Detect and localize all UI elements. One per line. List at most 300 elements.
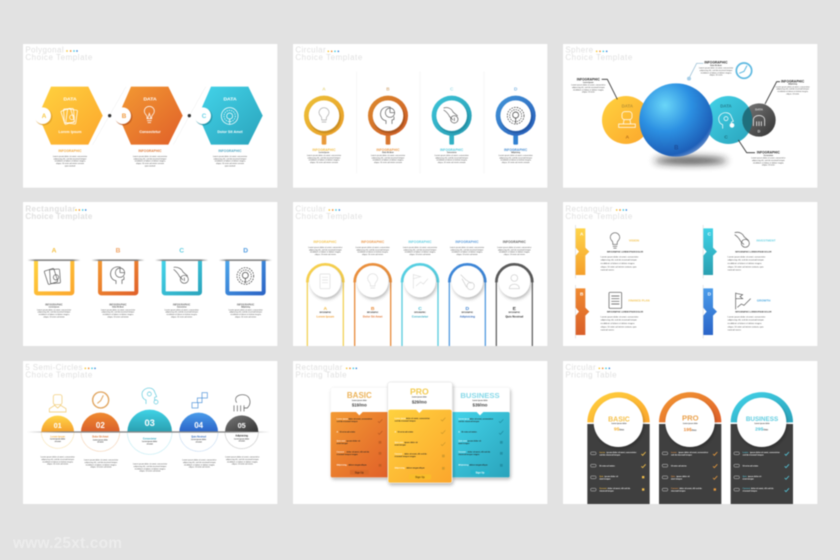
ring captions: Lorem ipsum dolor sit amet, consectetur	[499, 154, 533, 157]
pricing column: pro: Ut enim ad minim	[671, 464, 687, 467]
arch E: adipiscing elit, sed do eiusmod tempor	[498, 248, 531, 251]
tab D: nostrud exerci	[728, 329, 742, 332]
pricing card: basic: dolor sit amet, consectetur	[348, 418, 372, 421]
callout: C: Lorem ipsum dolor sit amet, consectetur	[751, 157, 786, 160]
ring B	[368, 87, 408, 145]
pricing column: basic: ipsum dolor sit amet, consectetur	[607, 451, 637, 454]
pricing card: basic: Lorem ipsum	[337, 419, 349, 421]
pricing column: business: sed do eiusmod tempor	[743, 453, 764, 456]
ring captions: aliqua. Ut enim ad minim veniam	[310, 161, 338, 164]
title: rectangular: Choice Template	[25, 212, 93, 221]
pricing column: pro: amet tempor	[671, 477, 682, 480]
frame captions: incididunt ut labore et dolore magna	[230, 313, 262, 316]
callout: D: Adipisicing	[788, 83, 797, 86]
title: rectangular tabs: Rectangular	[565, 204, 613, 213]
title: rectangular	[25, 204, 93, 221]
arch B	[355, 240, 391, 346]
captions: incididunt ut labore et dolore magna	[135, 160, 166, 163]
arch A	[307, 240, 343, 346]
arch B: incididunt ut labore et dolore magna	[357, 251, 389, 254]
ring captions: incididunt ut labore et dolore magna	[500, 159, 532, 162]
title: circular arches	[295, 204, 363, 221]
ring B: B	[386, 87, 390, 92]
pricing card: business: Sign Up	[476, 472, 485, 474]
frame captions: aliqua. Ut enim ad minim	[171, 315, 193, 318]
title: rectangular pricing	[295, 363, 357, 379]
semi-circle 02: sit amet	[97, 441, 104, 444]
tab C: INFOGRAPHIC LOREM IPSUM DOLOR	[735, 251, 772, 254]
arch E: INFOGRAPHIC	[503, 240, 527, 244]
pricing card: pro	[388, 382, 452, 483]
pricing card: basic: BASIC	[347, 391, 372, 400]
arch B: adipiscing elit, sed do eiusmod tempor	[356, 248, 389, 251]
semi-circle 05: 05	[238, 421, 246, 430]
pricing card: business: dolor sit amet, consectetur	[469, 418, 493, 421]
title: circular arches: Choice Template	[295, 212, 363, 221]
callout: C: adipiscing elit, sed do eiusmod tempor	[752, 159, 785, 162]
semi-circle 01: sit amet	[55, 440, 61, 443]
callout: B with clock: incididunt ut labore et dolore magna	[701, 71, 732, 74]
pricing column: pro	[659, 392, 721, 504]
arch A: adipiscing elit, sed do eiusmod tempor	[309, 248, 342, 251]
frame B: B	[116, 248, 121, 255]
arch C: aliqua. Ut enim ad minim	[409, 253, 431, 256]
pricing column: business: Ut enim ad minim	[743, 464, 759, 467]
ring captions: aliqua. Ut enim ad minim veniam	[502, 161, 530, 164]
arch E: incididunt ut labore et dolore magna	[499, 251, 531, 254]
arch C: INFOGRAPHIC	[408, 240, 432, 244]
pricing column: business: dolor sit amet, elit sed do	[751, 487, 774, 490]
title: polygonal: Choice Template	[25, 53, 93, 62]
arch E: INFOGRAPHIC	[509, 311, 521, 314]
semi-circle 03: Lorem ipsum dolor sit amet, consectetur	[133, 463, 167, 466]
arch D: Lorem ipsum dolor sit amet, consectetur	[450, 246, 484, 249]
circle C	[704, 96, 752, 144]
ring captions: INFOGRAPHIC	[504, 148, 528, 152]
callout: B with clock: Lorem ipsum dolor sit amet, consectetur	[699, 67, 733, 70]
frame captions: Dolor Sit Amet	[112, 306, 124, 309]
frame captions: INFOGRAPHIC	[173, 303, 191, 306]
tab C	[703, 225, 776, 278]
pricing column: basic: BASIC	[608, 416, 630, 423]
ring captions: incididunt ut labore et dolore magna	[373, 159, 404, 162]
tab A: Lorem ipsum dolor sit amet, consectetur	[601, 255, 639, 258]
frame A: A	[52, 248, 57, 255]
title: rectangular pricing: Rectangular	[295, 363, 343, 372]
frame captions: Lorem ipsum dolor sit amet, consectetur	[37, 308, 71, 311]
ring C: C	[450, 87, 454, 92]
frame captions: Adipisicing	[241, 306, 250, 309]
pricing column: pro: ipsum dolor sit	[676, 475, 690, 478]
ring A	[304, 87, 344, 145]
callout: B with clock: aliqua. Ut enim	[710, 74, 723, 77]
pricing card: basic: dolore magna aliqua	[348, 464, 367, 466]
title: sphere: Sphere	[565, 46, 594, 55]
arch B: aliqua. Ut enim ad minim	[362, 253, 384, 256]
pricing card: pro: Ut enim ad minim	[398, 430, 414, 433]
title: circular pricing: Pricing Table	[565, 370, 617, 379]
arch E: Lorem ipsum dolor sit amet, consectetur	[497, 246, 532, 249]
tab B: adipiscing elit, sed do eiusmod tempor	[601, 319, 637, 322]
title: rectangular tabs: Choice Template	[565, 212, 633, 221]
frame C	[155, 248, 208, 295]
circle D	[742, 103, 776, 137]
pricing column: business	[731, 392, 793, 504]
tab D: D	[708, 292, 712, 297]
semi-circle 04: Quis Nostrud	[191, 435, 207, 438]
pricing column: basic: eiusmod tempor	[599, 489, 614, 492]
captions: adipiscing elit, sed do eiusmod tempor	[134, 157, 167, 160]
tab A: nostrud exerci	[601, 269, 615, 272]
pricing column: basic: Lorem	[599, 452, 605, 454]
pricing column: basic: Consect	[599, 487, 607, 490]
circle A: A	[626, 135, 630, 141]
frame D: D	[243, 248, 248, 255]
panel: 5 semi-circles choice template	[23, 361, 277, 504]
arch C: INFOGRAPHIC	[414, 311, 427, 314]
pricing card: business: eiusmod tempor magna	[458, 453, 480, 456]
tab C: Lorem ipsum dolor sit amet, consectetur	[728, 255, 766, 258]
ring captions: INFOGRAPHIC	[440, 148, 464, 152]
frame captions: Lorem ipsum dolor sit amet, consectetur	[101, 308, 135, 311]
pricing card: business: BUSINESS	[460, 391, 500, 400]
tab B: INFOGRAPHIC LOREM IPSUM DOLOR	[607, 311, 644, 314]
pricing column: basic	[587, 392, 650, 504]
panel: rectangular tabs choice template	[563, 202, 817, 346]
captions: aliqua. Ut enim ad minim veniam	[136, 162, 164, 165]
tab C: adipiscing elit, sed do eiusmod tempor	[728, 259, 764, 262]
captions: quis nostrud	[65, 164, 75, 167]
tab A: INFOGRAPHIC LOREM IPSUM DOLOR	[607, 251, 644, 254]
arch C: Lorem ipsum dolor sit amet, consectetur	[403, 246, 437, 249]
pricing card: basic: Ut enim ad minim	[340, 430, 356, 433]
semi-circle 05: Adipisicing	[235, 435, 249, 438]
arch E: Quis Nostrud	[505, 315, 524, 319]
tab B: Lorem ipsum dolor sit amet, consectetur	[601, 315, 639, 318]
pricing column: basic: Quis	[599, 476, 603, 478]
pricing column: pro: 19$/mo	[683, 427, 697, 433]
pricing card: basic: Sign Up	[355, 472, 364, 474]
frame captions: adipiscing elit, sed do eiusmod tempor	[102, 311, 135, 314]
pricing card: pro: $29/mo	[412, 399, 427, 404]
circle C: DATA	[720, 103, 733, 108]
pricing card: business: Ut enim ad minim	[461, 430, 477, 433]
tab C: nostrud exerci	[728, 269, 742, 272]
semi-circle 04: incididunt ut labore et dolore magna	[184, 463, 216, 466]
title: rectangular pricing: Pricing Table	[295, 370, 347, 379]
pricing column: business: amet tempor	[743, 477, 754, 480]
arch E	[496, 240, 532, 346]
pricing card: basic: eiusmod tempor magna	[337, 453, 359, 456]
pricing card: business: Lorem ipsum dolor	[472, 400, 488, 402]
arch B: B	[371, 306, 375, 312]
pricing card: basic: Lorem ipsum dolor	[352, 400, 367, 402]
ring captions: INFOGRAPHIC	[312, 148, 336, 152]
semi-circle 05	[225, 395, 260, 466]
pricing card: business: Lorem ipsum	[458, 419, 470, 421]
arch D: INFOGRAPHIC	[462, 311, 474, 314]
pricing card: business: Consect	[458, 451, 466, 454]
frame captions: INFOGRAPHIC	[45, 303, 63, 306]
dividers and dots	[93, 87, 206, 145]
hexagon C: Dolor Sit Amet	[217, 130, 243, 134]
semi-circle 01: 01	[54, 421, 62, 430]
callout: C	[738, 140, 786, 167]
pricing card: business: dolor sit amet, elit sed do	[468, 451, 491, 454]
pricing card: basic: amet tempor	[337, 442, 348, 445]
ring captions: Consectetur	[447, 151, 457, 154]
pricing card: pro: sed do eiusmod tempor	[395, 419, 416, 422]
pricing card: basic: $19/mo	[352, 402, 367, 407]
pricing column: business: eiusmod tempor	[743, 489, 757, 492]
hexagon B: DATA	[143, 97, 157, 103]
semi-circle 03: sit amet	[147, 442, 153, 445]
callout: A: adipiscing elit, sed do eiusmod tempor	[572, 86, 605, 89]
hexagon A: DATA	[63, 97, 77, 103]
ring A: A	[322, 87, 326, 92]
tab C: incididunt ut labore et dolore magna	[728, 262, 762, 265]
hexagon C: C	[202, 113, 207, 120]
semi-circle 01: incididunt ut labore et dolore magna	[42, 460, 74, 463]
ring captions: aliqua. Ut enim ad minim veniam	[374, 161, 402, 164]
sphere B: B	[674, 145, 679, 151]
tab A	[575, 225, 644, 278]
ring captions: Adipisicing	[511, 151, 520, 154]
pricing card: pro: amet tempor	[395, 443, 406, 446]
panel: rectangular choice template	[23, 202, 277, 346]
semi-circle 05: adipiscing elit, sed do eiusmod tempor	[226, 458, 259, 461]
pricing card: business: A	[458, 430, 460, 433]
pricing column: business: ipsum dolor sit	[748, 475, 762, 478]
ring captions: aliqua. Ut enim ad minim veniam	[438, 161, 466, 164]
pricing column: pro: Lorem	[671, 452, 677, 454]
semi-circle 03: incididunt ut labore et dolore magna	[135, 467, 166, 470]
callout: D: incididunt ut labore et dolore magna	[777, 90, 809, 93]
arch D: adipiscing elit, sed do eiusmod tempor	[451, 248, 484, 251]
callout: A: Lorem Ipsum	[583, 82, 594, 84]
tab D: aliqua. Ut enim ad minim veniam, quis	[728, 325, 764, 328]
title: circular pricing: Circular	[565, 363, 596, 372]
semi-circle 04: aliqua. Ut enim ad minim	[189, 466, 210, 469]
arch D: incididunt ut labore et dolore magna	[452, 251, 483, 254]
pricing card: business: Quis nost	[458, 440, 467, 443]
pricing column: business: Lorem	[743, 452, 749, 454]
semi-circle 03: Lorem ipsum dolor	[142, 441, 158, 443]
tab B: B	[580, 292, 584, 297]
title: rectangular: Rectangular	[25, 204, 76, 213]
ring captions: incididunt ut labore et dolore magna	[309, 159, 340, 162]
callout: A: INFOGRAPHIC	[577, 78, 601, 82]
tab D: adipiscing elit, sed do eiusmod tempor	[728, 319, 764, 322]
captions: incididunt ut labore et dolore magna	[55, 160, 86, 163]
semi-circle 05: incididunt ut labore et dolore magna	[227, 460, 259, 463]
semi-circle 01: Lorem ipsum dolor sit amet, consectetur	[41, 456, 75, 459]
semi-circle 04	[179, 393, 218, 469]
captions: INFOGRAPHIC	[218, 149, 242, 153]
tab D	[703, 285, 772, 338]
callout: A	[571, 78, 617, 99]
tab B: FINANCE PLAN	[628, 299, 650, 303]
column dividers	[357, 72, 484, 173]
hexagon B	[114, 87, 183, 145]
semi-circle 01: Lorem Ipsum	[50, 436, 65, 438]
hexagon B: B	[122, 113, 127, 120]
frame captions: incididunt ut labore et dolore magna	[39, 313, 70, 316]
title: circular arches: Circular	[295, 204, 326, 213]
panel: rectangular pricing table	[293, 361, 547, 504]
ring captions	[307, 148, 533, 164]
hexagon C	[194, 87, 263, 145]
title: circular: Choice Template	[295, 53, 363, 62]
semi-circle 03: Consectetur	[143, 437, 157, 440]
tab D: GROWTH	[757, 299, 770, 303]
panel: sphere choice template	[563, 44, 817, 188]
pricing card: pro: dolor sit amet, consectetur	[406, 417, 430, 420]
semi-circle 02: Dolor Sit Amet	[92, 436, 109, 439]
ring captions: adipiscing elit, sed do eiusmod tempor	[372, 156, 405, 159]
pricing column: business: Lorem ipsum dolor	[754, 423, 770, 425]
captions: aliqua. Ut enim ad minim veniam	[216, 162, 244, 165]
arch E: E	[513, 306, 517, 312]
circle A	[602, 96, 650, 144]
semi-circle 01: adipiscing elit, sed do eiusmod tempor	[41, 458, 74, 461]
ring captions: adipiscing elit, sed do eiusmod tempor	[435, 156, 468, 159]
callout: D: INFOGRAPHIC	[781, 79, 805, 83]
tab C: INVESTMENT	[756, 239, 776, 243]
arch A: incididunt ut labore et dolore magna	[310, 251, 342, 254]
ring captions: Lorem ipsum dolor sit amet, consectetur	[371, 154, 405, 157]
title: circular	[295, 46, 363, 62]
callout: C: INFOGRAPHIC	[757, 151, 781, 155]
title: polygonal: Polygonal	[25, 46, 64, 55]
frame captions: incididunt ut labore et dolore magna	[166, 313, 198, 316]
pricing card: business	[451, 387, 510, 477]
frame captions: aliqua. Ut enim ad minim	[43, 315, 65, 318]
pricing column: pro: sed do eiusmod tempor	[671, 453, 692, 456]
tab A: A	[580, 232, 584, 237]
pricing column: business: BUSINESS	[746, 416, 778, 423]
panel: polygonal choice template	[23, 44, 277, 188]
pricing column: pro: PRO	[682, 414, 699, 423]
tab C: aliqua. Ut enim ad minim veniam, quis	[728, 265, 764, 268]
captions: incididunt ut labore et dolore magna	[215, 160, 246, 163]
pricing card: pro: eiusmod tempor magna	[395, 455, 417, 458]
pricing column: pro: eiusmod tempor	[671, 489, 686, 492]
callout: C: Consectetur	[763, 154, 774, 157]
title: polygonal	[25, 46, 93, 62]
captions: INFOGRAPHIC	[138, 149, 162, 153]
pricing card: pro: dolore magna aliqua	[406, 468, 425, 470]
pricing card: basic: sed do eiusmod tempor	[337, 420, 358, 423]
pricing card: pro: dolor sit amet, elit sed do	[404, 453, 428, 456]
ring captions: Lorem ipsum dolor sit amet, consectetur	[307, 154, 341, 157]
circle C: C	[724, 135, 728, 141]
pricing column: pro: Lorem ipsum dolor	[683, 423, 698, 425]
pricing column: basic: Lorem ipsum dolor	[611, 423, 627, 425]
tab B: nostrud exerci	[601, 329, 615, 332]
arch C	[402, 240, 438, 346]
semi-circle 04: adipiscing elit, sed do eiusmod tempor	[183, 461, 216, 464]
ring captions: INFOGRAPHIC	[376, 148, 400, 152]
pricing card: basic: Quis nost	[337, 440, 346, 443]
frame B	[91, 248, 145, 295]
captions: quis nostrud	[225, 164, 235, 167]
captions: INFOGRAPHIC	[58, 149, 82, 153]
frame A	[27, 248, 81, 295]
frame captions: aliqua. Ut enim ad minim	[235, 315, 257, 318]
pricing column: basic: amet tempor	[599, 477, 611, 480]
callout: A: incididunt ut labore et dolore magna	[573, 88, 605, 91]
captions: quis nostrud	[145, 164, 155, 167]
panel: circular arch choice template	[293, 202, 547, 346]
callout: D	[765, 79, 810, 104]
frame captions: Lorem ipsum dolor sit amet, consectetur	[165, 308, 199, 311]
callout: B with clock: INFOGRAPHIC	[704, 61, 728, 65]
pricing card: pro: Quis nost	[395, 441, 404, 444]
pricing card: basic: dolor sit amet, elit sed do	[347, 451, 370, 454]
pricing card: pro: Consect	[395, 453, 402, 456]
pricing card: basic: Adipisicing	[337, 463, 348, 466]
captions: Lorem ipsum dolor sit amet, consectetur	[53, 155, 87, 158]
circle D: D	[758, 130, 761, 134]
frame captions: Consectetur	[177, 306, 187, 309]
arch C: Consectetur	[412, 315, 429, 319]
frame captions: incididunt ut labore et dolore magna	[103, 313, 134, 316]
callout: B with clock	[687, 61, 752, 81]
tab D: incididunt ut labore et dolore magna	[728, 322, 762, 325]
semi-circle 02: Lorem ipsum dolor sit amet, consectetur	[84, 459, 118, 462]
frame captions: adipiscing elit, sed do eiusmod tempor	[165, 311, 198, 314]
hexagon C: DATA	[223, 97, 237, 103]
circle A: DATA	[622, 103, 634, 108]
pricing card: basic: ipsum dolor sit	[347, 440, 360, 443]
ring captions: Lorem Ipsum	[319, 152, 330, 154]
pricing card: pro: Sign Up	[415, 476, 425, 479]
arch A: aliqua. Ut enim ad minim	[315, 253, 336, 256]
pricing card: basic: A	[337, 430, 339, 433]
pricing card: business: ipsum dolor sit	[468, 440, 481, 443]
pricing column: business: 29$/mo	[755, 427, 769, 433]
title: semi-circles	[25, 363, 96, 379]
pricing column: pro: dolor sit amet, elit sed do	[679, 487, 703, 490]
horizontal baseline	[27, 431, 270, 433]
arch D: D	[466, 306, 470, 312]
arch D: Adipisicing	[460, 315, 475, 319]
tab A: aliqua. Ut enim ad minim veniam, quis	[601, 265, 637, 268]
pricing card: pro: A	[395, 430, 397, 433]
semi-circle 04: sit amet	[196, 440, 202, 443]
pricing column: pro: Quis	[671, 476, 675, 478]
ring C	[432, 87, 472, 145]
pricing column: basic: sed do eiusmod tempor	[599, 453, 621, 456]
arch A: Lorem Ipsum	[316, 315, 335, 319]
semi-circle 05: Lorem ipsum dolor	[234, 438, 250, 440]
semi-circle 01: Lorem ipsum dolor	[50, 439, 66, 441]
title: sphere	[565, 46, 633, 62]
panel: circular pricing table	[563, 361, 817, 504]
arch B: Dolor Sit Amet	[363, 315, 382, 319]
pricing column: basic: dolor sit amet, elit sed do	[608, 487, 631, 490]
hexagon A: A	[42, 113, 47, 120]
callout: D: aliqua. Ut enim	[786, 92, 799, 95]
callout: D: Lorem ipsum dolor sit amet, consectetur	[776, 85, 810, 88]
pricing column: business: Consect	[743, 487, 750, 490]
tab C: C	[708, 232, 712, 237]
captions: aliqua. Ut enim ad minim veniam	[56, 162, 84, 165]
panel: circular choice template	[293, 44, 547, 188]
semi-circle 05: Lorem ipsum dolor sit amet, consectetur	[225, 456, 260, 459]
callout: C: incididunt ut labore et dolore magna	[753, 161, 785, 164]
